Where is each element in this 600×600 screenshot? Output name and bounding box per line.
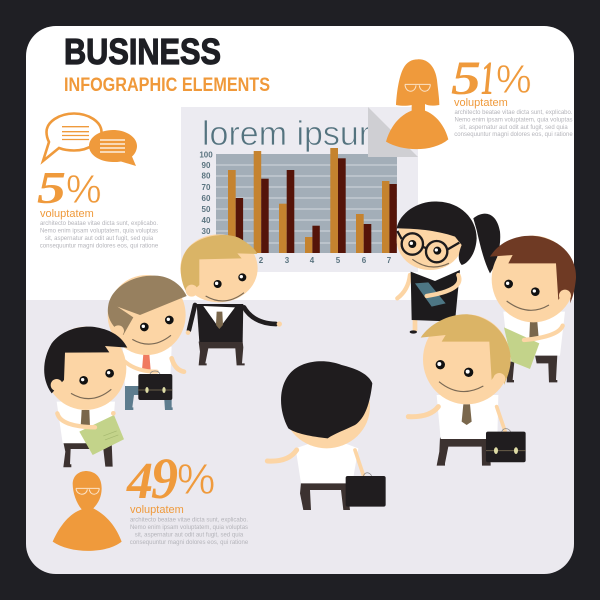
text block: left description: voluptatem	[40, 208, 94, 220]
bar chart: 3	[285, 256, 290, 265]
text block: right description: sit, aspernatur aut odit aut fugit, sed quia	[459, 125, 568, 131]
text block: bottom description: consequuntur magni dolores eos, qui ratione	[130, 540, 249, 546]
bar chart: 50	[202, 205, 211, 214]
bar chart: 100	[199, 150, 213, 160]
stat: 5%: 5	[37, 162, 66, 213]
character: blond man with briefcase	[408, 314, 526, 466]
bar chart: 7	[387, 256, 392, 265]
stat: 51%: %	[496, 58, 532, 102]
icon: man silhouette	[53, 471, 122, 551]
bar chart: 5	[336, 256, 341, 265]
text block: bottom description: Nemo enim ipsam voluptatem, quia voluptas	[130, 525, 248, 531]
bar chart: 30	[202, 227, 211, 236]
text block: right description: voluptatem	[454, 97, 508, 109]
stat: 51%: 1	[481, 52, 494, 105]
stat: 51%	[451, 52, 532, 105]
character: brown-haired man with briefcase	[108, 275, 187, 410]
text block: left description: sit, aspernatur aut odit aut fugit, sed quia	[45, 236, 154, 242]
character: blond man in suit	[180, 234, 282, 365]
character: black-haired man with folder	[44, 327, 127, 467]
text block: left description	[40, 208, 159, 249]
stat: 5%	[37, 162, 102, 213]
bar chart: 70	[202, 183, 211, 192]
subtitle: INFOGRAPHIC ELEMENTS	[64, 75, 270, 96]
text block: bottom description: architecto beatae vitae dicta sunt, explicabo.	[130, 518, 248, 524]
stat: 49%	[126, 446, 215, 511]
icon: woman silhouette	[386, 59, 448, 149]
text block: right description	[454, 97, 573, 138]
stat: 49%: 9	[151, 446, 178, 511]
text block: left description: consequuntur magni dolores eos, qui ratione	[40, 243, 159, 249]
bar chart: 60	[202, 194, 211, 203]
text block: bottom description: voluptatem	[130, 504, 184, 516]
text block: left description: Nemo enim ipsam voluptatem, quia voluptas	[40, 229, 158, 235]
icon: speech bubbles	[43, 114, 137, 166]
bar chart: 40	[202, 216, 211, 225]
bar chart: 6	[362, 256, 367, 265]
page fold	[368, 107, 418, 157]
text block: bottom description: sit, aspernatur aut odit aut fugit, sed quia	[135, 533, 244, 539]
text block: right description: Nemo enim ipsam voluptatem, quia voluptas	[454, 117, 573, 123]
text block: right description: architecto beatae vitae dicta sunt, explicabo.	[454, 110, 573, 116]
stat: 51%: 5	[451, 52, 481, 105]
character: woman with glasses	[397, 202, 500, 334]
bar chart: 4	[310, 256, 315, 265]
panel: chart sheet	[181, 107, 418, 272]
title: BUSINESS	[64, 31, 221, 72]
text block: left description: architecto beatae vitae dicta sunt, explicabo.	[40, 221, 158, 227]
stat: 49%: 4	[126, 453, 153, 510]
bar chart: 80	[202, 172, 211, 180]
bar chart: 90	[202, 161, 211, 170]
stat: 49%: %	[177, 456, 215, 504]
text block: bottom description	[130, 504, 249, 546]
stat: 5%: %	[66, 168, 102, 212]
character: brown-red haired man with folder	[490, 236, 576, 382]
bar chart	[199, 148, 397, 265]
character: man seen from behind	[267, 361, 386, 510]
chart heading: lorem ipsum	[202, 115, 387, 153]
bar chart: 2	[259, 256, 264, 265]
text block: right description: consequuntur magni dolores eos, qui ratione	[454, 132, 573, 138]
